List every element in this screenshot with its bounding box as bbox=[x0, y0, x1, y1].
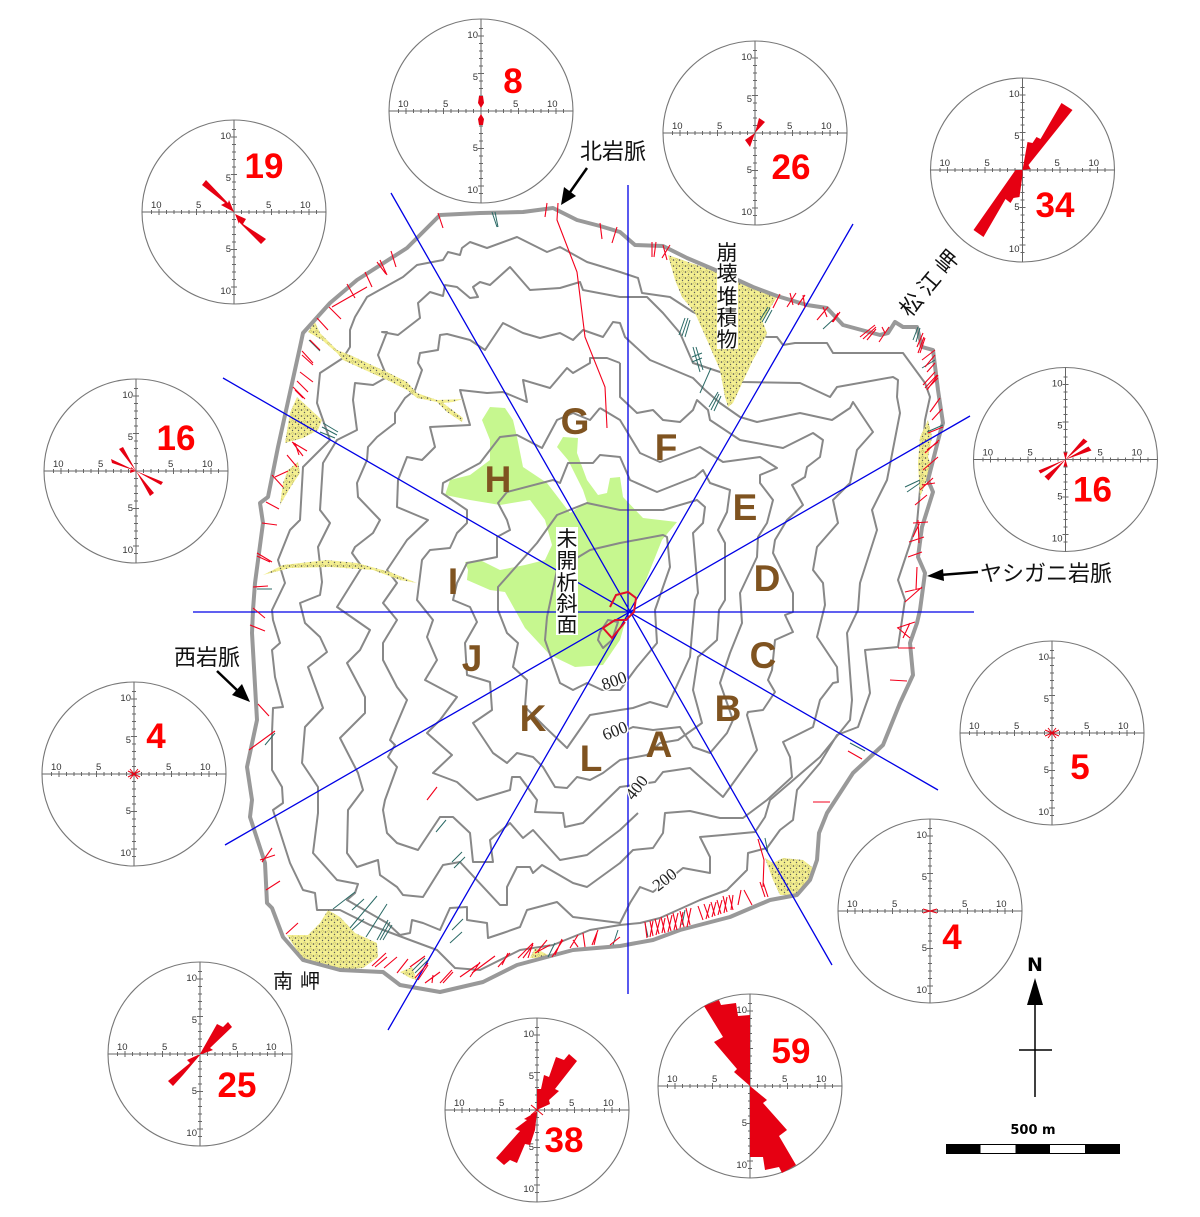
rose diagram: west 4: 5 bbox=[126, 735, 131, 746]
scale bar: 500 m bbox=[1010, 1123, 1056, 1138]
sector letters A to L: D bbox=[754, 558, 780, 599]
rose diagram: east 16: 10 bbox=[1132, 448, 1142, 458]
rose diagram: north-east 26 bbox=[663, 41, 847, 225]
rose diagram: south-east 4: 5 bbox=[962, 899, 967, 910]
rose diagram: east 16: 5 bbox=[1098, 448, 1103, 458]
rose diagram: south-east 4 bbox=[838, 819, 1022, 1003]
rose diagram: south 59: 10 bbox=[667, 1074, 678, 1085]
sector letters A to L: F bbox=[655, 427, 677, 468]
rose diagram: west 16: 10 bbox=[202, 459, 213, 470]
rose diagram: north 8: 5 bbox=[513, 99, 518, 110]
contour elevation labels bbox=[599, 668, 681, 895]
sector letters A to L: A bbox=[646, 724, 672, 765]
rose diagram: south-east 4: 10 bbox=[916, 985, 927, 996]
rose diagram: west 4: 10 bbox=[120, 693, 131, 704]
arrow: 西岩脈 bbox=[217, 671, 250, 702]
rose diagram: south-west 25: 5 bbox=[192, 1015, 197, 1026]
arrow: 北岩脈 bbox=[561, 168, 587, 205]
label: 未開析斜面: 未 bbox=[556, 528, 578, 551]
rose diagram: north-east 26: 10 bbox=[672, 121, 683, 132]
crater rim: red bbox=[603, 592, 636, 638]
rose diagram: east 16: 5 bbox=[1057, 420, 1062, 432]
rose diagram: south 38: 10 bbox=[523, 1184, 534, 1195]
rose diagram: north 8 bbox=[389, 19, 573, 203]
rose diagram: north-west 19 bbox=[142, 120, 326, 304]
rose diagram: south-east 4: 4 bbox=[942, 918, 962, 957]
rose diagram: north-west 19: 5 bbox=[266, 200, 271, 211]
rose diagram: east 5: 10 bbox=[969, 721, 980, 732]
sector letters A to L: B bbox=[715, 688, 741, 729]
rose diagram: south 59: 5 bbox=[742, 1047, 747, 1058]
sector letters A to L bbox=[448, 401, 780, 779]
rose diagram: west 4: 5 bbox=[96, 762, 101, 773]
rose diagram: south 38: 10 bbox=[603, 1098, 614, 1109]
rose diagram: west 4: 5 bbox=[166, 762, 171, 773]
rose diagram: north-east 26: 26 bbox=[772, 148, 810, 187]
rose diagram: north-east 26: 10 bbox=[741, 52, 752, 63]
rose diagram: north-east 34: 10 bbox=[1009, 244, 1020, 255]
rose diagram: south-west 25: 5 bbox=[232, 1042, 237, 1053]
rose diagram: west 16: 10 bbox=[53, 459, 64, 470]
rose diagram: north-east 34: 5 bbox=[1014, 202, 1020, 213]
rose diagram: north 8: 5 bbox=[473, 72, 478, 83]
rose diagram: east 5: 5 bbox=[1044, 694, 1049, 705]
label: 崩壊堆積物: 積 bbox=[716, 307, 738, 330]
arrow: ヤシガニ岩脈 bbox=[927, 569, 978, 581]
contour elevation labels: 600 bbox=[600, 717, 630, 744]
rose diagram: north 8: 5 bbox=[443, 99, 448, 110]
label: 崩壊堆積物 bbox=[716, 242, 738, 352]
rose diagram: north-east 26: 5 bbox=[717, 121, 722, 132]
rose diagram: south-west 25: 10 bbox=[186, 973, 197, 984]
rose diagram: east 5: 5 bbox=[1084, 721, 1089, 732]
rose diagram: north-east 26: 5 bbox=[747, 165, 752, 176]
rose diagram: west 16: 10 bbox=[122, 390, 133, 401]
rose diagram: north 8: 8 bbox=[503, 62, 523, 101]
rose diagram: south-west 25: 25 bbox=[218, 1066, 256, 1105]
rose diagram: south 38: 38 bbox=[545, 1121, 583, 1160]
rose diagram: south-east 4: 10 bbox=[847, 899, 858, 910]
label: 西岩脈: 西岩脈 bbox=[174, 645, 240, 670]
rose diagram: north-west 19: 5 bbox=[226, 244, 231, 255]
label: 崩壊堆積物: 物 bbox=[716, 329, 738, 352]
rose diagram: north-east 26: 10 bbox=[821, 121, 832, 132]
sector letters A to L: G bbox=[561, 401, 589, 442]
rose diagram: south 38: 10 bbox=[523, 1029, 534, 1040]
rose diagram: south 38: 5 bbox=[529, 1071, 534, 1082]
rose diagram: south-east 4: 10 bbox=[996, 899, 1007, 910]
sector letters A to L: H bbox=[485, 459, 511, 500]
rose diagram: north-west 19: 10 bbox=[151, 200, 162, 211]
rose diagram: east 5: 10 bbox=[1038, 807, 1049, 818]
rose diagram: east 16: 16 bbox=[1073, 470, 1112, 510]
red dykes bbox=[249, 203, 943, 983]
contour elevation labels: 200 bbox=[649, 864, 681, 895]
rose diagram: north-west 19: 10 bbox=[300, 200, 311, 211]
rose diagram: east 5: 10 bbox=[1038, 652, 1049, 663]
sector letters A to L: I bbox=[448, 561, 458, 602]
sector letters A to L: K bbox=[520, 698, 547, 739]
rose diagram: north 8: 10 bbox=[467, 30, 478, 41]
coastline bbox=[247, 208, 943, 992]
rose diagram: south-west 25: 10 bbox=[266, 1042, 277, 1053]
rose diagram: north-east 26: 5 bbox=[747, 94, 752, 105]
rose diagram: east 16 bbox=[974, 368, 1158, 552]
north arrow bbox=[1019, 954, 1052, 1097]
rose diagram: south 59: 10 bbox=[736, 1160, 747, 1171]
rose diagram: south 59 bbox=[658, 994, 842, 1178]
rose diagram: south 38: 10 bbox=[454, 1098, 465, 1109]
label: 未開析斜面: 面 bbox=[556, 614, 578, 637]
rose diagram: north 8: 10 bbox=[547, 99, 558, 110]
rose diagram: east 16: 5 bbox=[1057, 492, 1062, 502]
rose diagram: west 4: 4 bbox=[146, 717, 166, 756]
rose diagram: south 59: 10 bbox=[736, 1005, 747, 1016]
rose diagram: north 8: 5 bbox=[473, 143, 478, 154]
rose diagram: east 16: 10 bbox=[982, 448, 993, 458]
rose diagram: north 8: 10 bbox=[398, 99, 409, 110]
rose diagram: north-east 34: 5 bbox=[1054, 158, 1060, 169]
rose diagram: east 16: 10 bbox=[1052, 378, 1062, 390]
north arrow: N bbox=[1027, 954, 1043, 976]
rose diagram: south-west 25: 5 bbox=[192, 1086, 197, 1097]
sector lines: blue radial lines bbox=[193, 185, 974, 1030]
rose diagram: north-west 19: 19 bbox=[245, 147, 283, 186]
rose diagram: north-east 34: 34 bbox=[1036, 186, 1075, 225]
rose diagram: west 16: 5 bbox=[168, 459, 173, 470]
label: 崩壊堆積物: 堆 bbox=[716, 286, 738, 309]
label: 未開析斜面 bbox=[556, 527, 578, 637]
rose diagram: west 4: 10 bbox=[51, 762, 62, 773]
rose diagram: west 16: 5 bbox=[98, 459, 103, 470]
rose diagram: south 59: 5 bbox=[742, 1118, 747, 1129]
teal dykes bbox=[257, 212, 943, 973]
rose diagram: east 5 bbox=[960, 641, 1144, 825]
rose diagram: north-west 19: 5 bbox=[226, 173, 231, 184]
label: 南岬: 南岬 bbox=[273, 970, 327, 993]
map: volcanic island bbox=[193, 185, 974, 1030]
rose diagram: south-west 25: 10 bbox=[117, 1042, 128, 1053]
rose diagram: south 59: 5 bbox=[712, 1074, 717, 1085]
sector letters A to L: E bbox=[733, 487, 757, 528]
rose diagram: south-east 4: 10 bbox=[916, 830, 927, 841]
contour elevation labels: 400 bbox=[621, 772, 652, 804]
rose diagram: north-east 34: 10 bbox=[940, 158, 950, 169]
rose diagram: north 8: 10 bbox=[467, 185, 478, 196]
rose diagram: north-east 34: 5 bbox=[984, 158, 990, 169]
rose diagram: west 16: 5 bbox=[128, 432, 133, 443]
rose diagram: south-west 25: 10 bbox=[186, 1128, 197, 1139]
rose diagram: south 59: 10 bbox=[816, 1074, 827, 1085]
label: 未開析斜面: 開 bbox=[556, 550, 578, 573]
rose diagram: south 38: 5 bbox=[529, 1142, 534, 1153]
rose diagram: north-east 34: 10 bbox=[1009, 89, 1020, 100]
rose diagram: south-east 4: 5 bbox=[922, 943, 927, 954]
rose diagram: west 4: 10 bbox=[120, 848, 131, 859]
rose diagram: north-east 34: 5 bbox=[1014, 131, 1020, 142]
label: 崩壊堆積物: 壊 bbox=[716, 263, 738, 286]
rose diagram: east 16: 5 bbox=[1028, 448, 1033, 458]
rose diagram: south 38 bbox=[445, 1018, 629, 1202]
rose diagram: east 16: 10 bbox=[1052, 534, 1062, 544]
sector letters A to L: L bbox=[580, 738, 602, 779]
rose diagram: south 59: 59 bbox=[772, 1032, 810, 1071]
label: 崩壊堆積物: 崩 bbox=[716, 242, 738, 265]
label: ヤシガニ岩脈: ヤシガニ岩脈 bbox=[980, 561, 1112, 586]
scale bar bbox=[946, 1123, 1120, 1154]
rose diagram: south 38: 5 bbox=[569, 1098, 574, 1109]
unincised slope: green area bbox=[445, 407, 677, 667]
rose diagram: south-west 25: 5 bbox=[162, 1042, 167, 1053]
rose diagram: east 5: 5 bbox=[1014, 721, 1019, 732]
rose diagram: west 4 bbox=[42, 682, 226, 866]
label: 未開析斜面: 析 bbox=[556, 572, 578, 595]
rose diagram: north-east 34 bbox=[930, 78, 1114, 262]
sector letters A to L: J bbox=[462, 638, 482, 679]
rose diagram: west 16: 5 bbox=[128, 503, 133, 514]
rose diagram: north-east 26: 5 bbox=[787, 121, 792, 132]
rose diagram: south-east 4: 5 bbox=[892, 899, 897, 910]
rose diagram: south 38: 5 bbox=[499, 1098, 504, 1109]
rose diagram: south-west 25 bbox=[108, 962, 292, 1146]
rose diagram: north-west 19: 5 bbox=[196, 200, 201, 211]
label: 松江岬: 松江岬 bbox=[895, 241, 968, 321]
contour lines bbox=[272, 237, 930, 970]
rose diagram: north-east 34: 10 bbox=[1088, 158, 1099, 169]
rose diagram: south-east 4: 5 bbox=[922, 872, 927, 883]
rose diagram: east 5: 5 bbox=[1070, 748, 1090, 787]
sector letters A to L: C bbox=[750, 635, 776, 676]
rose diagram: north-west 19: 10 bbox=[220, 131, 231, 142]
rose diagram: south 59: 5 bbox=[782, 1074, 787, 1085]
debris deposits: yellow speckled areas bbox=[263, 255, 932, 980]
rose diagram: west 16: 16 bbox=[157, 419, 195, 458]
label: 北岩脈: 北岩脈 bbox=[580, 139, 646, 164]
rose diagram: west 4: 10 bbox=[200, 762, 211, 773]
rose diagram: north-west 19: 10 bbox=[220, 286, 231, 297]
label: 未開析斜面: 斜 bbox=[556, 593, 578, 616]
contour elevation labels: 800 bbox=[599, 668, 629, 694]
rose diagram: east 5: 10 bbox=[1118, 721, 1129, 732]
rose diagram: west 16 bbox=[44, 379, 228, 563]
rose diagram: north-east 26: 10 bbox=[741, 207, 752, 218]
rose diagram: west 16: 10 bbox=[122, 545, 133, 556]
rose diagram: east 5: 5 bbox=[1044, 765, 1049, 776]
rose diagram: west 4: 5 bbox=[126, 806, 131, 817]
